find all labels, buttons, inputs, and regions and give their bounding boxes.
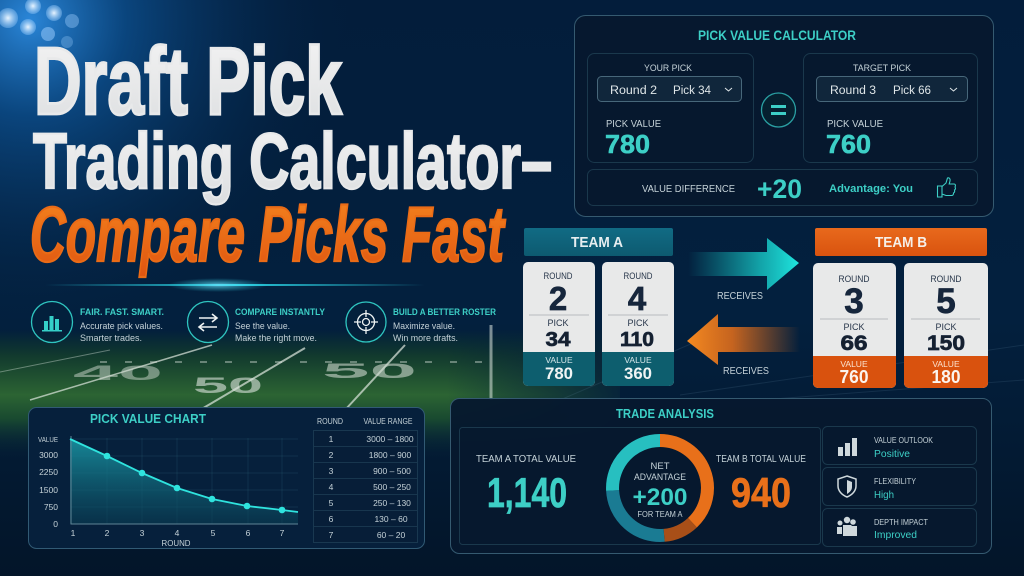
donut: net advantage: FOR TEAM A [638, 509, 683, 519]
team B header: TEAM B [875, 234, 927, 251]
your pick box: 780 [605, 129, 650, 159]
team A card: round 4: VALUE [624, 355, 652, 365]
line chart: 3000 [39, 450, 58, 460]
your pick box: Round 2 [610, 85, 657, 97]
your pick box [588, 54, 754, 162]
value range table: ROUND [317, 417, 343, 426]
line chart: 4 [175, 528, 180, 538]
team B card: round 3: 760 [840, 367, 868, 387]
donut: net advantage: ADVANTAGE [634, 472, 686, 483]
team B card: round 5: 180 [932, 367, 960, 387]
background: football field: 50 [322, 360, 417, 383]
line chart [38, 435, 298, 548]
line chart: 750 [44, 502, 58, 512]
panel: pick value calculator [574, 16, 994, 216]
panel: trade analysis [450, 398, 992, 554]
arrow: to team A: RECEIVES [723, 366, 769, 377]
value range table: 5 [329, 498, 334, 508]
title: Draft Pick [34, 28, 342, 135]
team A card: round 4: 360 [624, 364, 652, 383]
team A card: round 2: PICK [547, 318, 569, 328]
team A header: TEAM A [571, 234, 623, 251]
team A total: 1,140 [487, 469, 567, 516]
value range table: 4 [329, 482, 334, 492]
calculator heading: PICK VALUE CALCULATOR [698, 28, 856, 43]
feature: compare instantly: COMPARE INSTANTLY [235, 307, 326, 318]
value range table: 1800 – 900 [369, 450, 412, 460]
feature: build a better roster [346, 302, 496, 344]
team A card: round 2: 780 [545, 364, 573, 383]
line chart: 2 [105, 528, 110, 538]
line chart: 6 [246, 528, 251, 538]
value range table: 130 – 60 [374, 514, 408, 524]
stat: flexibility [822, 468, 976, 506]
team B card: round 5: 150 [927, 332, 965, 355]
team A card: round 2: 34 [546, 329, 571, 351]
arrow: to team A [687, 314, 800, 377]
team A card: round 4: 4 [628, 280, 647, 317]
feature: compare instantly: Make the right move. [235, 333, 317, 344]
stat: depth impact: DEPTH IMPACT [874, 518, 928, 527]
team B card: round 3: 3 [844, 282, 864, 321]
arrow: to team B [688, 238, 799, 302]
feature: compare instantly [188, 302, 326, 344]
title: Compare Picks Fast [30, 190, 506, 278]
feature: compare instantly: See the value. [235, 321, 290, 332]
chart heading: PICK VALUE CHART [90, 412, 206, 426]
team B card: round 5: 5 [936, 282, 956, 321]
line chart: VALUE [38, 435, 58, 444]
stat: depth impact: Improved [874, 530, 917, 541]
your pick box: YOUR PICK [644, 63, 693, 74]
stat: flexibility: High [874, 490, 894, 501]
value range table [314, 417, 418, 542]
target pick box: 760 [826, 129, 871, 159]
donut: net advantage [613, 440, 707, 535]
team A card: round 4: ROUND [624, 271, 653, 281]
value range table: 500 – 250 [373, 482, 411, 492]
panel: pick value chart [28, 408, 424, 548]
value difference row [588, 170, 978, 206]
team A total: TEAM A TOTAL VALUE [476, 453, 576, 465]
value range table: 250 – 130 [373, 498, 411, 508]
feature: fair fast smart: FAIR. FAST. SMART. [80, 307, 164, 318]
value range table: 6 [329, 514, 334, 524]
your pick box: Pick 34 [673, 85, 712, 97]
value range table: 3 [329, 466, 334, 476]
team B total [716, 453, 806, 516]
team A card: round 4 [602, 262, 674, 386]
team B card: round 5: VALUE [932, 359, 960, 369]
team A card: round 2 [523, 262, 595, 386]
background: football field: 50 [193, 373, 263, 398]
stat: value outlook: VALUE OUTLOOK [874, 436, 934, 445]
background: football field: 40 [73, 362, 163, 385]
value range table: 7 [329, 530, 334, 540]
team B card: round 3: ROUND [838, 274, 870, 284]
background: football field [0, 325, 1024, 460]
target pick box [804, 54, 978, 162]
value difference row: +20 [757, 174, 802, 204]
equals icon [762, 93, 796, 127]
target pick box: Pick 66 [893, 85, 931, 97]
team A card: round 2: 2 [549, 280, 567, 317]
line chart: ROUND [162, 538, 190, 548]
value range table: 60 – 20 [377, 530, 405, 540]
team B card: round 5: PICK [935, 322, 957, 332]
team B card: round 5: ROUND [930, 274, 962, 284]
feature: build a better roster: BUILD A BETTER ROSTER [393, 307, 496, 318]
donut: net advantage: +200 [632, 484, 688, 511]
value range table: 1 [329, 434, 334, 444]
donut: net advantage: NET [650, 461, 670, 472]
team B card: round 3: VALUE [840, 359, 868, 369]
feature: fair fast smart [32, 302, 164, 344]
stat: value outlook: Positive [874, 449, 910, 460]
line chart: 0 [53, 519, 58, 529]
team A header [524, 228, 673, 256]
team B total: 940 [731, 469, 791, 516]
value difference row: VALUE DIFFERENCE [642, 184, 735, 195]
team A card: round 4: PICK [627, 318, 649, 328]
line chart: 3 [140, 528, 145, 538]
feature: build a better roster: Win more drafts. [393, 333, 458, 344]
feature: fair fast smart: Smarter trades. [80, 333, 142, 344]
team A total [476, 453, 576, 516]
title [30, 28, 552, 278]
team A card: round 2: VALUE [545, 355, 573, 365]
line chart: 1 [71, 528, 76, 538]
icon: thumbs up [938, 178, 955, 197]
team B card: round 5 [904, 263, 988, 388]
line chart: 2250 [39, 467, 58, 477]
line chart: 5 [211, 528, 216, 538]
team A card: round 4: 110 [620, 329, 654, 351]
value difference row: Advantage: You [829, 183, 913, 195]
glowing divider [45, 278, 425, 292]
value range table: VALUE RANGE [364, 417, 412, 426]
feature: build a better roster: Maximize value. [393, 321, 455, 332]
value range table: 3000 – 1800 [366, 434, 414, 444]
stat: flexibility: FLEXIBILITY [874, 477, 917, 486]
trade heading: TRADE ANALYSIS [616, 407, 714, 421]
stat: depth impact [822, 508, 976, 546]
arrow: to team B: RECEIVES [717, 291, 763, 302]
target pick box: PICK VALUE [827, 119, 883, 130]
title: Trading Calculator– [33, 116, 552, 205]
stat: value outlook [822, 426, 976, 464]
target pick box: TARGET PICK [853, 63, 912, 74]
line chart: 1500 [39, 485, 58, 495]
value range table: 2 [329, 450, 334, 460]
team B total: TEAM B TOTAL VALUE [716, 453, 806, 465]
team B header [815, 228, 987, 256]
team B card: round 3 [813, 263, 896, 388]
value range table: 900 – 500 [373, 466, 411, 476]
team A card: round 2: ROUND [544, 271, 573, 281]
target pick box: Round 3 [830, 85, 876, 97]
feature: fair fast smart: Accurate pick values. [80, 321, 163, 332]
line chart: 7 [280, 528, 285, 538]
team B card: round 3: 66 [840, 332, 868, 355]
your pick box: PICK VALUE [606, 119, 661, 130]
team B card: round 3: PICK [843, 322, 865, 332]
